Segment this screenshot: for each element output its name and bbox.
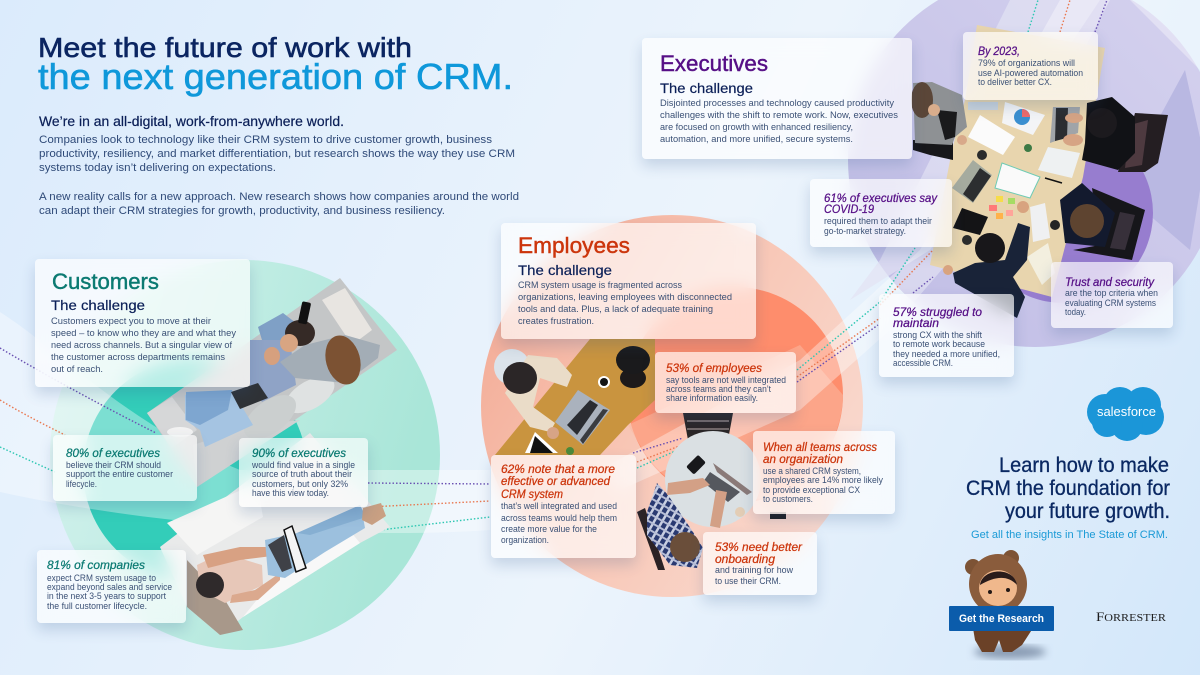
callout: by 2023: 79% of organizations will bbox=[978, 58, 1075, 68]
intro text block: A new reality calls for a new approach. New research shows how companies around the world bbox=[39, 191, 519, 203]
callout: 57% struggled to maintain: maintain bbox=[893, 317, 939, 330]
callout: 81% of companies: 81% of companies bbox=[47, 559, 145, 572]
callout: 90% of executives: source of truth about their bbox=[252, 469, 352, 479]
callout: trust and security: today. bbox=[1065, 307, 1086, 317]
callout: 90% of executives: have this view today. bbox=[252, 488, 329, 498]
panel: customers challenge card: Customers expect you to move at their bbox=[51, 316, 212, 327]
intro text block: can adapt their CRM strategies for growth, productivity, and business resiliency. bbox=[39, 205, 445, 217]
callout: 61% of executives: COVID-19 bbox=[824, 203, 875, 216]
panel: executives challenge card: Disjointed processes and technology caused productivity bbox=[660, 98, 894, 109]
callout: when all teams across an organization bbox=[753, 431, 895, 514]
callout: when all teams across an organization: use a shared CRM system, bbox=[763, 466, 861, 476]
callout: 61% of executives: required them to adapt their bbox=[824, 216, 932, 226]
photo: couple on grey sofa bbox=[147, 278, 397, 487]
white flowing ribbon bbox=[0, 0, 1200, 533]
callout: when all teams across an organization: to provide exceptional CX bbox=[763, 485, 860, 495]
call to action headline: Learn how to make bbox=[999, 454, 1169, 477]
icon: salesforce cloud logo: salesforce bbox=[1097, 404, 1156, 419]
employees circles bbox=[481, 215, 863, 597]
panel: employees challenge card: organizations, leaving employees with disconnected bbox=[518, 292, 732, 303]
callout: by 2023: use AI-powered automation bbox=[978, 68, 1083, 78]
callout: 61% of executives bbox=[810, 179, 952, 247]
research link text: Get all the insights in The State of CRM. bbox=[971, 529, 1168, 541]
panel: employees challenge card: creates frustration. bbox=[518, 316, 594, 327]
panel: customers challenge card bbox=[35, 259, 250, 387]
photo: woman with laptop on white sofa bbox=[160, 433, 390, 635]
panel: customers challenge card: Customers bbox=[52, 269, 159, 294]
footer panel: logo, call to action, mascot bbox=[949, 387, 1170, 660]
callout: by 2023: to deliver better CX. bbox=[978, 77, 1052, 87]
callout: 80% of executives: 80% of executives bbox=[66, 447, 160, 460]
callout: 90% of executives: 90% of executives bbox=[252, 447, 346, 460]
button: get the research bbox=[949, 606, 1054, 631]
callout: 53% need better onboarding: onboarding bbox=[715, 553, 776, 566]
callout: 57% struggled to maintain bbox=[879, 294, 1014, 377]
callout: 80% of executives bbox=[53, 435, 197, 501]
panel: executives challenge card: The challenge bbox=[660, 80, 753, 96]
callout: 62% note a more effective CRM: that’s well integrated and used bbox=[501, 501, 617, 511]
executives circles bbox=[848, 0, 1200, 347]
callout: 90% of executives: would find value in a single bbox=[251, 460, 355, 470]
callout: trust and security: are the top criteria when bbox=[1065, 288, 1158, 298]
intro text block: We’re in an all-digital, work-from-anywhere world. bbox=[39, 114, 344, 129]
intro text block: productivity, resiliency, and market differentiation, but research shows the way they use CRM bbox=[39, 148, 515, 160]
callout: 81% of companies: the full customer lifecycle. bbox=[47, 601, 147, 611]
intro text block bbox=[39, 114, 519, 217]
panel: executives challenge card: Executives bbox=[660, 51, 768, 76]
panel: customers challenge card: speed – to know who they are and what they bbox=[51, 328, 236, 339]
button: get the research: Get the Research bbox=[959, 613, 1044, 625]
customers circles bbox=[50, 260, 440, 650]
callout: 53% of employees: 53% of employees bbox=[666, 362, 762, 375]
photo: man at round table bbox=[637, 413, 786, 570]
call to action headline: your future growth. bbox=[1005, 500, 1170, 523]
callout: 81% of companies: in the next 3-5 years to support bbox=[47, 591, 166, 601]
panel: executives challenge card bbox=[642, 38, 912, 159]
title: the next generation of CRM. bbox=[38, 56, 513, 97]
callout: by 2023: By 2023, bbox=[978, 45, 1020, 58]
panel: executives challenge card: challenges with the shift to remote work. Now, executives bbox=[660, 110, 898, 121]
callout: 62% note a more effective CRM: 62% note that a more bbox=[501, 463, 616, 476]
callout: 57% struggled to maintain: they needed a more unified, bbox=[893, 349, 1000, 359]
callout: 57% struggled to maintain: to remote work because bbox=[893, 339, 985, 349]
callout: 53% of employees: share information easily. bbox=[666, 393, 758, 403]
callout: 62% note a more effective CRM: effective or advanced bbox=[501, 475, 611, 488]
title: Meet the future of work with bbox=[38, 32, 412, 63]
callout: 80% of executives: support the entire customer bbox=[66, 469, 173, 479]
icon: salesforce cloud logo bbox=[1087, 387, 1164, 441]
callout: 80% of executives: lifecycle. bbox=[66, 479, 97, 489]
panel: employees challenge card bbox=[501, 223, 756, 339]
callout: trust and security: Trust and security bbox=[1065, 276, 1155, 289]
intro text block: systems today isn’t delivering on expectations. bbox=[39, 162, 276, 174]
dotted line: teal bbox=[0, 0, 1038, 530]
callout: 53% need better onboarding: to use their CRM. bbox=[715, 576, 781, 586]
panel: executives challenge card: automation, and more unified, secure systems. bbox=[660, 134, 853, 145]
callout: 57% struggled to maintain: strong CX with the shift bbox=[893, 330, 982, 340]
panel: customers challenge card: The challenge bbox=[51, 297, 145, 313]
callout: by 2023 bbox=[963, 32, 1098, 100]
callout: 81% of companies bbox=[37, 550, 186, 623]
call to action headline bbox=[966, 454, 1170, 523]
callout: 61% of executives: go-to-market strategy. bbox=[824, 226, 906, 236]
callout: trust and security bbox=[1051, 262, 1173, 328]
panel: executives challenge card: are focused on growth with enhanced resiliency, bbox=[660, 122, 853, 133]
callout: 53% of employees bbox=[655, 352, 796, 413]
callout: 53% need better onboarding: and training for how bbox=[715, 565, 793, 575]
callout: when all teams across an organization: to customers. bbox=[763, 494, 813, 504]
panel: customers challenge card: need across channels. But a singular view of bbox=[51, 340, 232, 351]
callout: 53% of employees: say tools are not well integrated bbox=[666, 375, 786, 385]
callout: 57% struggled to maintain: accessible CRM. bbox=[893, 358, 953, 368]
callout: 81% of companies: expand beyond sales and service bbox=[47, 582, 172, 592]
panel: customers challenge card: out of reach. bbox=[51, 364, 103, 375]
photo: executives meeting table bbox=[911, 25, 1168, 318]
dotted line: purple bbox=[0, 0, 1107, 484]
callout: 53% of employees: across teams and they can’t bbox=[666, 384, 771, 394]
callout: 57% struggled to maintain: 57% struggled to bbox=[893, 306, 983, 319]
panel: employees challenge card: CRM system usage is fragmented across bbox=[518, 280, 682, 291]
callout: 62% note a more effective CRM bbox=[491, 455, 636, 558]
callout: 62% note a more effective CRM: CRM system bbox=[501, 488, 563, 501]
callout: trust and security: evaluating CRM systems bbox=[1065, 298, 1156, 308]
callout: 90% of executives: customers, but only 32% bbox=[252, 479, 348, 489]
dotted line: orange bbox=[0, 0, 1070, 507]
photo: woman at wooden desk bbox=[494, 339, 655, 455]
callout: 53% need better onboarding: 53% need better bbox=[715, 541, 803, 554]
callout: when all teams across an organization: an organization bbox=[763, 453, 843, 466]
callout: 80% of executives: believe their CRM should bbox=[66, 460, 161, 470]
callout: 62% note a more effective CRM: create more value for the bbox=[501, 524, 597, 534]
callout: 61% of executives: 61% of executives say bbox=[824, 192, 938, 205]
logo: forrester: FORRESTER bbox=[1096, 609, 1166, 624]
callout: 62% note a more effective CRM: organization. bbox=[501, 535, 549, 545]
callout: when all teams across an organization: When all teams across bbox=[763, 441, 877, 454]
mascot: bear character bbox=[965, 550, 1046, 659]
call to action headline: CRM the foundation for bbox=[966, 477, 1170, 500]
panel: employees challenge card: The challenge bbox=[518, 262, 612, 278]
panel: employees challenge card: tools and data. Plus, a lack of adequate training bbox=[518, 304, 713, 315]
title bbox=[38, 32, 513, 97]
callout: 81% of companies: expect CRM system usage to bbox=[47, 573, 156, 583]
callout: 53% need better onboarding bbox=[703, 532, 817, 595]
callout: when all teams across an organization: employees are 14% more likely bbox=[763, 475, 883, 485]
callout: 90% of executives bbox=[239, 438, 368, 507]
callout: 62% note a more effective CRM: across teams would help them bbox=[501, 513, 617, 523]
panel: customers challenge card: the customer across departments remains bbox=[51, 352, 225, 363]
intro text block: Companies look to technology like their CRM system to drive customer growth, business bbox=[39, 134, 493, 146]
panel: employees challenge card: Employees bbox=[518, 233, 630, 258]
